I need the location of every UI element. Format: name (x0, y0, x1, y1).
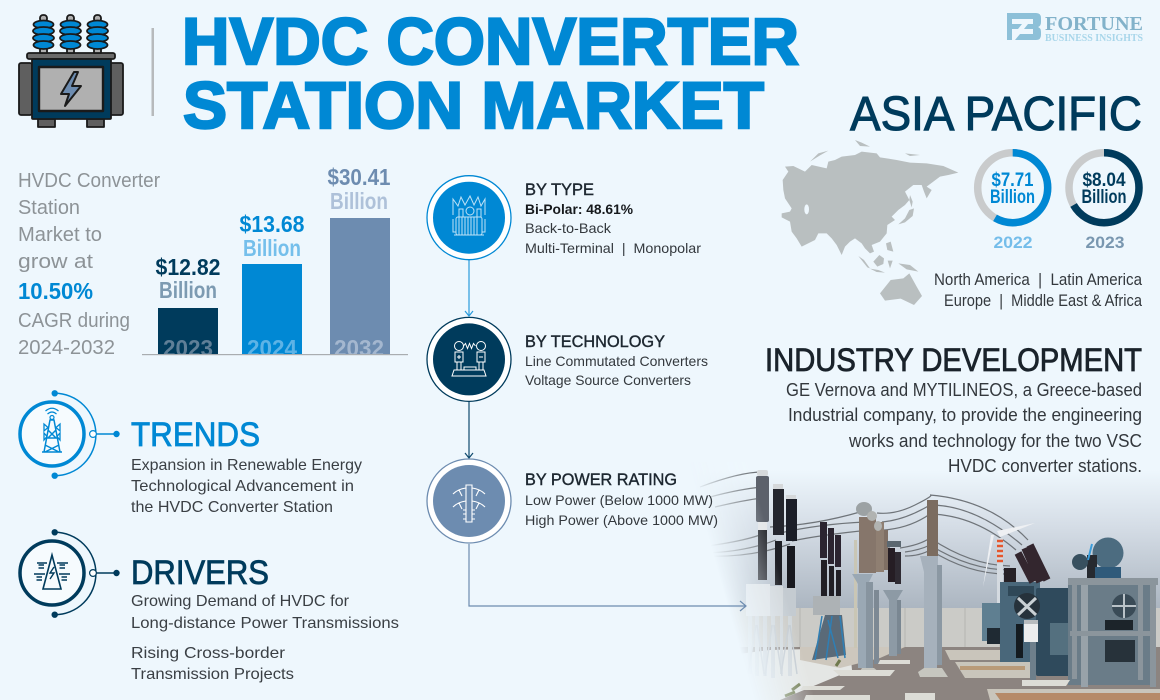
panel: drivers: Long-distance Power Transmissions (131, 615, 399, 632)
bar chart: market size: $12.82 (156, 254, 220, 280)
text block: CAGR summary: Market to (18, 224, 102, 246)
text block: other regions: North America | Latin America (934, 271, 1143, 289)
bar chart: market size: Billion (243, 235, 301, 261)
panel: by technology: BY TECHNOLOGY (525, 333, 665, 351)
title: HVDC CONVERTER (182, 4, 799, 78)
bar chart: market size: Billion (159, 277, 217, 303)
panel: trends: TRENDS (131, 416, 260, 454)
title: STATION MARKET (183, 68, 764, 142)
text block: CAGR summary: 10.50% (18, 278, 93, 304)
sub: wires (700, 472, 1028, 574)
bar chart: market size (142, 164, 408, 361)
donut: 2022 value: Billion (990, 187, 1035, 208)
flow line: type to technology (465, 260, 473, 316)
donut: 2023 value: $8.04 (1082, 170, 1126, 191)
donut: 2022 value: $7.71 (992, 170, 1034, 191)
panel: by technology (427, 317, 708, 401)
icon: converter unit (427, 176, 511, 260)
donut: 2023 value: 2023 (1086, 233, 1124, 252)
panel: drivers: DRIVERS (131, 554, 269, 592)
logo: Fortune Business Insights: FORTUNE (1045, 13, 1143, 35)
panel: drivers (20, 530, 399, 683)
donut: 2023 value (1069, 153, 1139, 252)
panel: by power rating: Low Power (Below 1000 MW) (525, 492, 713, 508)
panel: by type: Back-to-Back (525, 220, 612, 236)
icon: power pole (427, 459, 511, 543)
panel: by type (427, 176, 701, 260)
flow line: technology to power rating (465, 402, 473, 458)
text block: industry development: works and technology for the two VSC (848, 431, 1142, 451)
donut: 2023 value: Billion (1082, 187, 1126, 208)
panel: by type: Multi-Terminal | Monopolar (525, 240, 701, 256)
donut: 2022 value (978, 153, 1048, 252)
logo: Fortune Business Insights: BUSINESS INSIGHTS (1045, 33, 1143, 44)
panel: by power rating: BY POWER RATING (525, 471, 677, 489)
title (182, 4, 799, 142)
sub: breaker bank B (812, 522, 857, 660)
sub: ground pads (785, 650, 1160, 700)
logo: Fortune Business Insights (1007, 13, 1143, 44)
flow arrow: power rating to station photo (469, 544, 746, 611)
text block: CAGR summary: HVDC Converter (18, 170, 160, 192)
text block: CAGR summary: CAGR during (18, 310, 130, 332)
text block: industry development (786, 380, 1142, 476)
text block: CAGR summary: 2024-2032 (18, 337, 115, 359)
sub: breaker bank A (746, 470, 797, 678)
icon: transmission pylon (20, 530, 119, 617)
sub: transformer (982, 538, 1156, 685)
bar chart: market size: 2032 (334, 335, 384, 361)
panel: trends: Expansion in Renewable Energy (131, 457, 362, 474)
panel: by power rating: High Power (Above 1000 MW) (525, 512, 718, 528)
text block: industry development: GE Vernova and MYTILINEOS, a Greece-based (786, 380, 1142, 400)
panel: trends: the HVDC Converter Station (131, 499, 333, 516)
panel: by technology: Line Commutated Converters (525, 353, 708, 369)
icon: voltage source converter (427, 317, 511, 401)
panel: by type: BY TYPE (525, 181, 594, 199)
donut: 2022 value: 2022 (994, 233, 1032, 252)
panel: trends (20, 391, 362, 516)
bar chart: market size: Billion (330, 188, 388, 214)
panel: drivers: Rising Cross-border (131, 645, 286, 662)
panel: by type: Bi-Polar: 48.61% (525, 201, 634, 217)
icon: transformer (19, 15, 123, 127)
bar chart: market size: 2023 (163, 335, 213, 361)
bar chart: market size: $30.41 (328, 164, 391, 190)
text block: CAGR summary: Station (18, 197, 80, 219)
sub: tall insulated pillars (852, 500, 948, 677)
bar chart: market size: 2024 (247, 335, 297, 361)
text block: industry development: HVDC converter stations. (948, 456, 1142, 476)
heading: Asia Pacific: ASIA PACIFIC (850, 88, 1142, 141)
panel: trends: Technological Advancement in (131, 478, 354, 495)
panel: by power rating (427, 459, 718, 543)
sub: wind turbine (972, 504, 1034, 603)
sub: steel frame (1068, 578, 1158, 687)
panel: drivers: Growing Demand of HVDC for (131, 593, 350, 610)
text block: CAGR summary: grow at (18, 251, 93, 273)
map: Asia Pacific (782, 140, 958, 305)
text block: industry development: Industrial company, to provide the engineering (788, 405, 1142, 425)
bar chart: market size: $13.68 (240, 211, 305, 237)
icon: telecom tower (20, 391, 119, 478)
panel: drivers: Transmission Projects (131, 666, 294, 683)
text block: other regions (934, 271, 1143, 310)
panel: by technology: Voltage Source Converters (525, 372, 691, 388)
text block: CAGR summary (18, 170, 160, 359)
photo: converter station yard (690, 462, 1160, 700)
